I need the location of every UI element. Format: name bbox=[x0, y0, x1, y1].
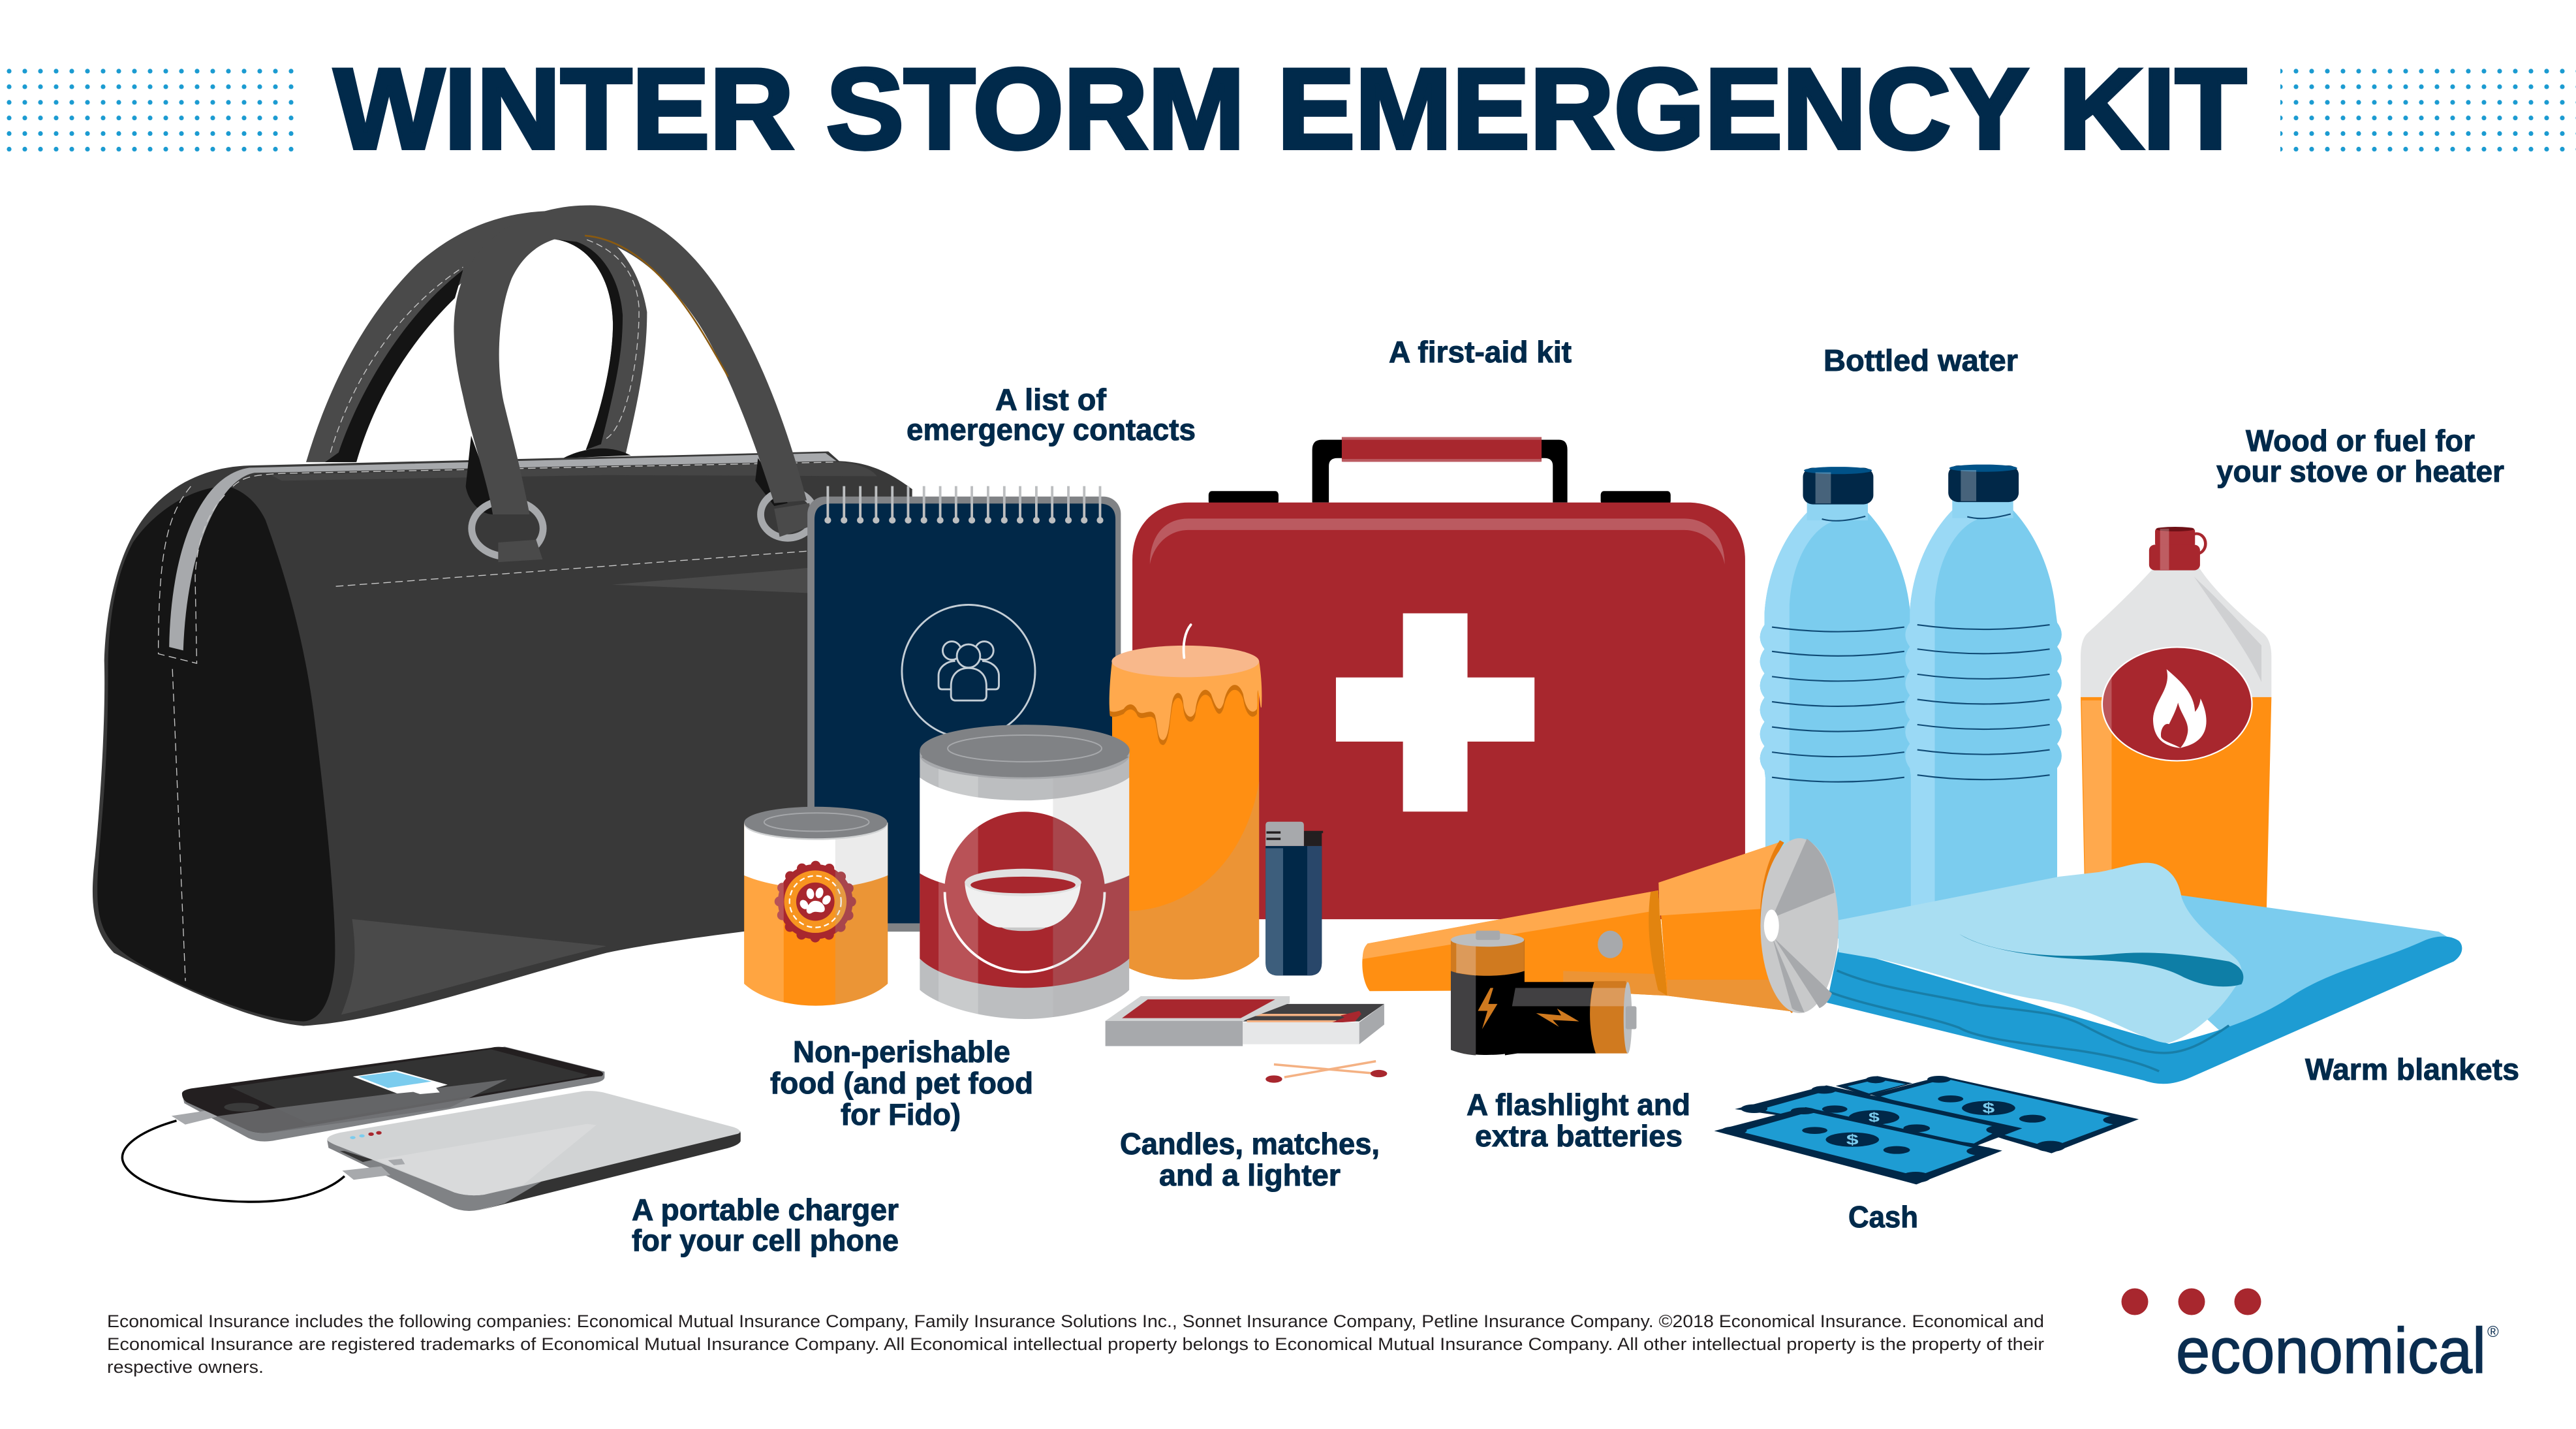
candle top bbox=[1111, 646, 1259, 677]
label: candles: and a lighter bbox=[1159, 1158, 1341, 1192]
label: portable charger: A portable charger bbox=[632, 1193, 899, 1227]
label: flashlight bbox=[1466, 1088, 1690, 1153]
kit handle grip bbox=[1342, 437, 1542, 462]
bag front handle bbox=[454, 205, 815, 562]
label: non-perishable food: Non-perishable bbox=[793, 1035, 1010, 1069]
warm blanket bbox=[1827, 863, 2462, 1084]
label: warm blankets: Warm blankets bbox=[2305, 1052, 2519, 1086]
label: contacts bbox=[907, 383, 1196, 447]
can stripes bbox=[744, 819, 890, 1011]
label: contacts: A list of bbox=[995, 383, 1107, 416]
title: WINTER STORM EMERGENCY KIT bbox=[334, 46, 2246, 173]
label: non-perishable food: food (and pet food bbox=[770, 1066, 1033, 1100]
label: contacts: emergency contacts bbox=[907, 413, 1196, 447]
phone and portable charger bbox=[122, 1046, 741, 1211]
blanket base bbox=[1827, 936, 2462, 1084]
bag back handle bbox=[306, 211, 647, 462]
fire label bbox=[2102, 646, 2252, 761]
middle bill: $ bbox=[1869, 1110, 1880, 1125]
back bill corner bbox=[1836, 1076, 1912, 1095]
footer legal text: Economical Insurance are registered trademarks of Economical Mutual Insurance Company. All Economical intellectual property belongs to Economical Mutual Insurance Company. All other intellectual property is the property of their bbox=[107, 1334, 2044, 1354]
label: bottled water: Bottled water bbox=[1823, 343, 2018, 377]
bag zipper bbox=[169, 453, 837, 650]
blanket fold lines bbox=[1827, 971, 2229, 1071]
can white label bbox=[920, 777, 1129, 894]
kit latches bbox=[1209, 491, 1671, 505]
logo: economical bbox=[2121, 1289, 2499, 1387]
label: flashlight: A flashlight and bbox=[1466, 1088, 1690, 1122]
label: wood or fuel: your stove or heater bbox=[2216, 454, 2504, 488]
can red label bbox=[920, 873, 1129, 988]
blanket back layer bbox=[2179, 895, 2461, 1039]
label: cash: Cash bbox=[1848, 1200, 1918, 1234]
cash bbox=[1715, 1076, 2139, 1184]
footer legal text bbox=[107, 1311, 2044, 1377]
icon: contacts circle bbox=[902, 605, 1035, 738]
label: wood or fuel bbox=[2216, 424, 2504, 488]
phone bbox=[172, 1046, 604, 1142]
label: first-aid kit: A first-aid kit bbox=[1389, 335, 1572, 369]
emblem ring bbox=[945, 892, 1105, 972]
candle shading bbox=[1112, 781, 1259, 979]
label: candles bbox=[1120, 1127, 1380, 1192]
front bill: $ bbox=[1846, 1132, 1859, 1148]
water bottle one bbox=[1760, 467, 1916, 939]
bottle body bbox=[2081, 567, 2271, 697]
candle wick bbox=[1184, 625, 1191, 657]
kit gloss bbox=[1150, 518, 1725, 564]
decorative dot grid right bbox=[2280, 63, 2576, 157]
notepad of emergency contacts bbox=[807, 486, 1121, 932]
bag body bbox=[93, 452, 912, 1026]
footer legal text: respective owners. bbox=[107, 1357, 264, 1377]
logo dots bbox=[2121, 1289, 2261, 1315]
label: candles: Candles, matches, bbox=[1120, 1127, 1380, 1161]
bag stitching bbox=[159, 462, 833, 981]
kit handle bbox=[1312, 440, 1568, 503]
icon: duffel bag bbox=[93, 205, 912, 1026]
paw seal bbox=[778, 864, 853, 939]
fuel bottle bbox=[2081, 527, 2271, 916]
flashlight head and lens bbox=[1658, 838, 1839, 1013]
small pet food can bbox=[744, 807, 890, 1011]
label: flashlight: extra batteries bbox=[1475, 1119, 1683, 1153]
can lid bbox=[744, 807, 888, 840]
can white band bbox=[744, 823, 888, 888]
water bottle two bbox=[1905, 465, 2062, 936]
icon: soup bowl bbox=[965, 869, 1081, 931]
charging cable bbox=[122, 1121, 345, 1202]
soup emblem bbox=[944, 811, 1105, 973]
large battery bbox=[1451, 931, 1525, 1055]
small battery bbox=[1505, 981, 1636, 1055]
right bill: $ bbox=[1983, 1101, 1995, 1116]
bag highlight bottom bbox=[341, 919, 606, 1014]
can lid bbox=[920, 725, 1130, 779]
bag side panel bbox=[97, 486, 335, 1022]
bottle cap bbox=[2149, 527, 2205, 571]
front bill bbox=[1715, 1107, 2002, 1184]
lighter, matches, flashlight handle and batteries bbox=[1106, 822, 1387, 1083]
can light stripes bbox=[939, 728, 1132, 1028]
footer legal text: Economical Insurance includes the following companies: Economical Mutual Insurance Company, Family Insurance Solutions Inc., Sonnet Insurance Company, Petline Insurance Company. ©2018 Economical Insurance. Economical and bbox=[107, 1311, 2044, 1331]
first-aid kit bbox=[1132, 437, 1745, 919]
blanket fold bbox=[1959, 934, 2243, 986]
kit case bbox=[1132, 503, 1745, 919]
label: non-perishable food: for Fido) bbox=[841, 1097, 961, 1131]
wax drip bbox=[1110, 661, 1262, 740]
label: portable charger: for your cell phone bbox=[632, 1223, 899, 1257]
matchbox bbox=[1106, 996, 1384, 1046]
flashlight bbox=[1362, 838, 1839, 1013]
label: portable charger bbox=[632, 1193, 899, 1257]
power bank bbox=[327, 1091, 741, 1211]
bottle left sheen bbox=[2082, 700, 2111, 879]
kit white cross bbox=[1336, 614, 1534, 811]
middle bill bbox=[1735, 1086, 2022, 1147]
blanket top bbox=[1839, 863, 2241, 1043]
bottle right shade bbox=[2194, 576, 2261, 682]
candle bbox=[1110, 625, 1262, 979]
label: non-perishable food bbox=[770, 1035, 1033, 1131]
notepad cover bbox=[815, 503, 1115, 923]
logo wordmark: economical bbox=[2176, 1315, 2486, 1387]
fuel level bbox=[2081, 697, 2271, 916]
flashlight button bbox=[1598, 931, 1622, 958]
right bill bbox=[1870, 1076, 2139, 1154]
bottled water bbox=[1760, 465, 2062, 939]
notepad backing bbox=[807, 497, 1121, 932]
can body bbox=[744, 823, 888, 1006]
flashlight handle bbox=[1362, 890, 1668, 996]
lighter bbox=[1265, 822, 1323, 975]
loose matches bbox=[1265, 1061, 1387, 1083]
wax drip shadow bbox=[1110, 666, 1259, 745]
can body bbox=[920, 751, 1129, 1019]
large soup can bbox=[920, 725, 1132, 1028]
bag highlight mid bbox=[612, 568, 809, 593]
decorative dot grid left bbox=[1, 63, 299, 157]
bag top band bbox=[271, 462, 877, 480]
registered mark: ® bbox=[2487, 1323, 2499, 1341]
icon: flame bbox=[2153, 669, 2207, 748]
batteries bbox=[1451, 931, 1636, 1055]
label: wood or fuel: Wood or fuel for bbox=[2246, 424, 2475, 458]
icon: paw bbox=[798, 887, 833, 914]
spiral binding bbox=[824, 486, 1104, 524]
candle body bbox=[1112, 661, 1259, 979]
